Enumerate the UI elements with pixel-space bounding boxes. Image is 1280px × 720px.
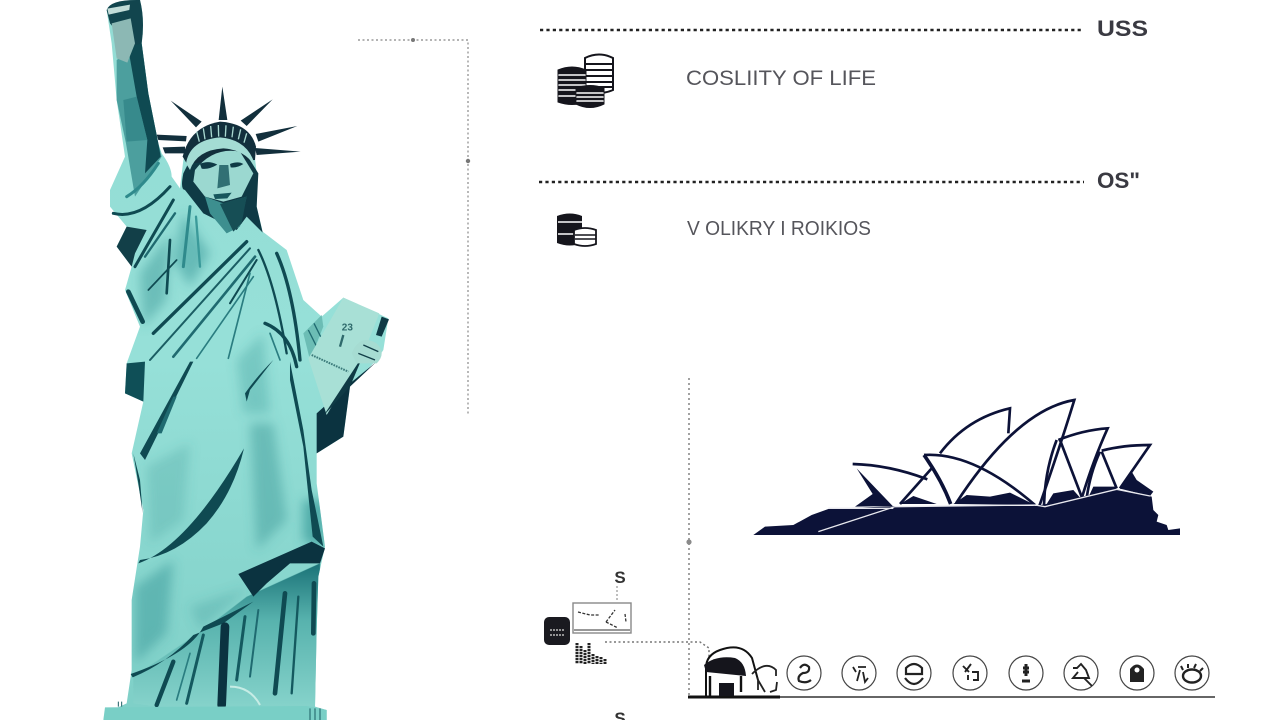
left hip shadow: [125, 362, 145, 402]
dark underarm patch: [117, 227, 147, 267]
icon: coin stacks small: [557, 214, 596, 246]
crown spikes: [157, 87, 301, 155]
tablet with hand: 23: [342, 323, 353, 334]
bottom dotted axis: [688, 378, 690, 695]
dark drape behind book: [317, 362, 377, 453]
icon: coin stacks large: [558, 54, 613, 108]
icon circle 3: [897, 656, 931, 690]
icon row: [787, 656, 1209, 690]
label S top: S: [614, 568, 626, 587]
head and crown: [182, 122, 263, 233]
section 1 heading: USS: [1097, 16, 1148, 41]
sandal: [230, 687, 260, 705]
robe soft shading: [135, 213, 327, 663]
lower pleat lines: [157, 583, 314, 705]
leader: cluster to dome: [605, 642, 709, 658]
icon circle 5: [1009, 656, 1043, 690]
map box: [573, 603, 631, 633]
tablet with hand: [303, 298, 389, 416]
illustration: Sydney Opera House: [753, 400, 1180, 535]
raised arm and torch: [107, 0, 162, 197]
section 1: cost of living: [540, 16, 1148, 108]
data cluster: [544, 568, 631, 720]
icon circle 8: [1175, 656, 1209, 690]
section 2: voluntary: [539, 168, 1140, 246]
lower robe folds: [131, 360, 325, 677]
section 2 label: V OLIKRY I ROIKIOS: [687, 218, 871, 240]
lower pleats base: [133, 563, 320, 707]
icon circle 4: [953, 656, 987, 690]
icon: domed building: [704, 647, 777, 696]
upper robe folds: [113, 163, 300, 367]
section 1 label: COSLIITY OF LIFE: [686, 67, 876, 90]
icon circle 6: [1064, 656, 1098, 690]
axis node: [686, 539, 692, 545]
leader node marks: [411, 38, 470, 163]
icon circle 7: [1120, 656, 1154, 690]
illustration: Statue of Liberty: [103, 0, 389, 720]
shell outlines: [853, 400, 1150, 506]
icon circle 1: [787, 656, 821, 690]
white roofline: [818, 489, 1150, 532]
icon: data drum: [544, 617, 570, 645]
statue silhouette: [103, 0, 388, 720]
pedestal: [103, 702, 327, 720]
mini bars: [577, 643, 605, 664]
icon circle 2: [842, 656, 876, 690]
shell shadows: [855, 468, 1153, 507]
baseline: [688, 696, 1215, 698]
harbour base: [753, 489, 1180, 535]
callout leader: top dotted bracket: [358, 40, 468, 415]
section 2 heading: OS": [1097, 168, 1140, 193]
